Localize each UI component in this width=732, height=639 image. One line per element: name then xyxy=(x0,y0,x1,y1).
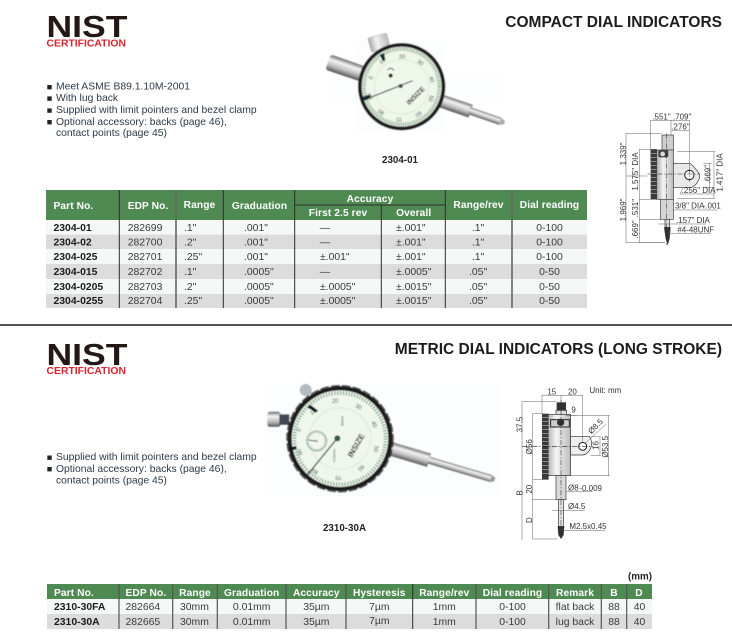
table row 2310-30A: lug back xyxy=(556,617,595,628)
technical drawing: compact indicator dimensions: 1.417" DIA xyxy=(716,153,725,192)
product photo: compact dial indicator 2304-01: 80 xyxy=(377,107,386,116)
table row 2304-025: .1" xyxy=(469,252,485,263)
table row 2304-0205: ±.0005" xyxy=(320,282,356,293)
technical drawing: metric indicator dimensions: Ø8 xyxy=(568,483,579,492)
table row 2304-015: .1" xyxy=(184,267,197,278)
table row 2304-0205: .2" xyxy=(184,282,197,293)
feature list: metric indicators xyxy=(47,452,257,486)
technical drawing: metric indicator dimensions: 20 xyxy=(525,484,534,494)
table row 2304-01: — xyxy=(320,223,331,234)
technical drawing: metric indicator dimensions: Ø4.5 xyxy=(568,502,586,511)
table row 2310-30A: 40 xyxy=(634,617,645,628)
technical drawing: compact indicator dimensions: .669" xyxy=(631,220,640,239)
table row 2304-01: 0-100 xyxy=(536,223,563,234)
technical drawing: metric indicator dimensions: 15 xyxy=(547,387,557,396)
caption: 2310-30A: 2310-30A xyxy=(323,523,366,534)
table header row: Dial reading xyxy=(520,200,579,211)
product photo: compact dial indicator 2304-01 xyxy=(325,33,507,132)
technical drawing: compact indicator dimensions xyxy=(619,112,725,245)
table header row: Graduation xyxy=(232,201,287,212)
table row 2310-30FA: 7µm xyxy=(369,602,390,613)
table row 2310-30A xyxy=(54,616,645,628)
table row 2310-30A: 282665 xyxy=(126,617,160,628)
product photo: compact dial indicator 2304-01: 30 xyxy=(416,59,424,67)
table header row: Graduation xyxy=(224,588,279,599)
technical drawing: metric indicator dimensions: 16 xyxy=(592,441,601,450)
caption: 2304-01: 2304-01 xyxy=(382,155,419,166)
table header row: EDP No. xyxy=(128,201,168,212)
table row 2304-0205: ±.0015" xyxy=(396,282,432,293)
product photo: metric dial indicator 2310-30A: 0 xyxy=(296,428,303,433)
spec table: compact dial indicators xyxy=(46,190,587,308)
unit label: mm: (mm) xyxy=(628,572,652,582)
technical drawing: metric indicator dimensions: M2.5x0.45 xyxy=(569,522,607,531)
product photo: metric dial indicator 2310-30A: INSIZE xyxy=(346,432,367,459)
product photo: metric dial indicator 2310-30A: 10 xyxy=(309,408,318,417)
logo: NIST certification (top): CERTIFICATION xyxy=(46,38,126,49)
table header row: Range/rev xyxy=(419,588,470,599)
table row 2304-025: ±.001" xyxy=(396,252,426,263)
table row 2310-30FA: 35µm xyxy=(303,602,329,613)
table row 2304-015: .0005" xyxy=(244,267,274,278)
feature list: metric indicators: contact points (page 45) xyxy=(56,475,167,486)
table row 2310-30A: 7µm xyxy=(369,616,390,627)
table row 2310-30A: 0.01mm xyxy=(233,617,270,628)
title: compact dial indicators: COMPACT DIAL INDICATORS xyxy=(505,14,722,31)
technical drawing: compact indicator dimensions: .276" xyxy=(671,122,690,131)
table header row: Accuracy xyxy=(347,194,394,205)
table row 2304-01: 282699 xyxy=(128,223,163,234)
product photo: compact dial indicator 2304-01: 10 xyxy=(378,58,387,66)
product photo: compact dial indicator 2304-01: 20 xyxy=(399,54,405,60)
product photo: compact dial indicator 2304-01: 70 xyxy=(396,115,402,121)
table row 2304-01: .1" xyxy=(469,223,485,234)
technical drawing: metric indicator dimensions: D xyxy=(525,517,534,523)
table header row: Part No. xyxy=(54,201,93,212)
table row 2304-015: 282702 xyxy=(128,267,163,278)
product photo: compact dial indicator 2304-01: 40 xyxy=(427,76,435,84)
feature list: compact indicators: Supplied with limit pointers and bezel clamp xyxy=(56,105,257,116)
technical drawing: compact indicator dimensions: .551" .709" xyxy=(652,112,691,121)
technical drawing: compact indicator dimensions: .531" xyxy=(631,199,640,217)
table header row: Part No. xyxy=(54,588,94,599)
table row 2304-015: 0-50 xyxy=(539,267,560,278)
table row 2304-025: .25" xyxy=(184,252,202,263)
technical drawing: metric indicator dimensions: Ø8.5 xyxy=(586,417,605,436)
table row 2304-02: 2304-02 xyxy=(54,238,92,249)
product photo: metric dial indicator 2310-30A: 60 xyxy=(356,463,365,472)
table row 2304-01: .1" xyxy=(184,223,197,234)
technical drawing: compact indicator dimensions: .669" xyxy=(704,165,713,183)
product photo: metric dial indicator 2310-30A xyxy=(265,383,500,497)
technical drawing: compact indicator dimensions: .157" DIA xyxy=(676,216,711,225)
product photo: compact dial indicator 2304-01: INSIZE xyxy=(406,86,427,107)
product photo: compact dial indicator 2304-01: 0 xyxy=(368,75,375,80)
table row 2310-30FA: 2310-30FA xyxy=(54,602,106,613)
product photo: metric dial indicator 2310-30A: 30 xyxy=(354,403,362,412)
product photo: metric dial indicator 2310-30A: 90 xyxy=(297,448,305,456)
product photo: metric dial indicator 2310-30A: 70 xyxy=(335,474,342,480)
feature list: metric indicators: Supplied with limit pointers and bezel clamp xyxy=(56,452,257,463)
table header row: First 2.5 rev xyxy=(309,208,367,219)
table row 2304-0255: 2304-0255 xyxy=(54,296,103,307)
table row 2304-01: ±.001" xyxy=(396,223,426,234)
product photo: metric dial indicator 2310-30A: 20 xyxy=(332,398,339,405)
product photo: metric dial indicator 2310-30A: 50 xyxy=(372,445,379,452)
product photo: compact dial indicator 2304-01: 60 xyxy=(414,109,422,118)
logo: NIST certification (bottom): CERTIFICATION xyxy=(46,366,126,377)
table row 2310-30FA: 1mm xyxy=(433,602,456,613)
feature list: metric indicators: Optional accessory: backs (page 46), xyxy=(56,464,227,475)
table row 2304-0255: .0005" xyxy=(244,296,274,307)
feature list: compact indicators xyxy=(47,81,257,139)
table row 2304-0255: .05" xyxy=(469,296,487,307)
table row 2304-01 xyxy=(54,223,563,234)
technical drawing: compact indicator dimensions: 1.339" xyxy=(619,142,628,165)
table row 2304-0205: .0005" xyxy=(244,282,274,293)
technical drawing: compact indicator dimensions: 1.575" DIA xyxy=(631,152,640,191)
table row 2304-0255: .25" xyxy=(184,296,202,307)
technical drawing: metric indicator dimensions: B xyxy=(516,490,525,496)
table row 2304-02: .2" xyxy=(184,238,197,249)
technical drawing: metric indicator dimensions: 9 xyxy=(571,405,576,414)
table row 2304-025: ±.001" xyxy=(320,252,350,263)
table row 2304-02: 0-100 xyxy=(536,238,563,249)
table header row: Overall xyxy=(396,208,431,219)
product photo: metric dial indicator 2310-30A: 40 xyxy=(370,420,378,429)
table row 2310-30FA: 30mm xyxy=(180,602,209,613)
technical drawing: metric indicator dimensions: Ø56 xyxy=(525,439,534,454)
table row 2310-30A: 1mm xyxy=(433,617,456,628)
technical drawing: metric indicator dimensions xyxy=(516,386,622,540)
table header row xyxy=(54,588,643,599)
table row 2304-0205: 282703 xyxy=(128,282,163,293)
logo: NIST certification (top): NIST xyxy=(46,9,128,44)
table row 2304-02: .001" xyxy=(244,238,268,249)
logo: NIST certification (bottom): NIST xyxy=(46,337,128,372)
product photo: compact dial indicator 2304-01: 50 xyxy=(426,94,434,102)
feature list: compact indicators: With lug back xyxy=(56,93,119,104)
table row 2304-0205 xyxy=(54,282,560,293)
table row 2304-02: 282700 xyxy=(128,238,163,249)
spec table: metric dial indicators xyxy=(47,584,652,629)
title: metric dial indicators: METRIC DIAL INDICATORS (LONG STROKE) xyxy=(395,341,722,358)
technical drawing: metric indicator dimensions: -0.009 xyxy=(579,484,603,493)
technical drawing: metric indicator dimensions: 20 xyxy=(568,387,577,396)
technical drawing: compact indicator dimensions: 1.969" xyxy=(619,198,628,221)
table row 2310-30A: 0-100 xyxy=(499,617,526,628)
table header row: Range xyxy=(184,200,216,211)
table row 2310-30A: 30mm xyxy=(180,617,209,628)
technical drawing: compact indicator dimensions: #4-48UNF xyxy=(677,225,714,234)
table row 2304-0255: 0-50 xyxy=(539,296,560,307)
technical drawing: metric indicator dimensions: 37.5 xyxy=(516,416,525,432)
product photo: metric dial indicator 2310-30A: 80 xyxy=(311,467,320,475)
table row 2304-02: .1" xyxy=(469,238,485,249)
feature list: compact indicators: Meet ASME B89.1.10M-2001 xyxy=(56,81,190,92)
table row 2310-30FA: 40 xyxy=(634,602,645,613)
table row 2310-30A: 88 xyxy=(608,617,620,628)
feature list: compact indicators: contact points (page 45) xyxy=(56,128,167,139)
table row 2304-025: 282701 xyxy=(128,252,163,263)
table header row: D xyxy=(635,588,643,599)
table row 2304-015 xyxy=(54,267,560,278)
table row 2310-30FA xyxy=(54,602,645,613)
product photo: compact dial indicator 2304-01: 90 xyxy=(367,92,375,100)
table row 2310-30FA: 0-100 xyxy=(499,602,526,613)
table header row: Range/rev xyxy=(453,200,504,211)
table row 2304-02: — xyxy=(320,238,331,249)
table row 2310-30FA: 88 xyxy=(608,602,620,613)
table row 2304-015: 2304-015 xyxy=(54,267,98,278)
table row 2304-01: .001" xyxy=(244,223,268,234)
technical drawing: metric indicator dimensions: Ø53.5 xyxy=(601,435,610,458)
table row 2304-015: — xyxy=(320,267,331,278)
table row 2304-0205: .05" xyxy=(469,282,487,293)
table header row xyxy=(54,194,579,219)
table row 2304-025: .001" xyxy=(244,252,268,263)
table header row: B xyxy=(610,588,618,599)
table row 2304-025: 0-100 xyxy=(536,252,563,263)
technical drawing: compact indicator dimensions: -.001 xyxy=(703,202,721,211)
feature list: compact indicators: Optional accessory: backs (page 46), xyxy=(56,117,227,128)
table row 2304-0205: 2304-0205 xyxy=(54,282,103,293)
table row 2310-30FA: flat back xyxy=(556,602,595,613)
table header row: Hysteresis xyxy=(353,588,406,599)
table row 2304-01: 2304-01 xyxy=(54,223,92,234)
technical drawing: compact indicator dimensions: .256" DIA xyxy=(682,186,716,195)
table row 2304-02 xyxy=(54,238,563,249)
technical drawing: compact indicator dimensions: 3/8" DIA xyxy=(675,202,705,211)
table row 2304-0255: ±.0005" xyxy=(320,296,356,307)
table row 2304-025: 2304-025 xyxy=(54,252,98,263)
table row 2310-30FA: 282664 xyxy=(126,602,160,613)
technical drawing: metric indicator dimensions: Unit: mm xyxy=(589,386,622,395)
table header row: EDP No. xyxy=(126,588,166,599)
table row 2310-30A: 2310-30A xyxy=(54,617,100,628)
table header row: Range xyxy=(179,588,211,599)
table row 2304-015: ±.0005" xyxy=(396,267,432,278)
table row 2304-02: ±.001" xyxy=(396,238,426,249)
table row 2304-015: .05" xyxy=(469,267,487,278)
table row 2304-0255: 282704 xyxy=(128,296,163,307)
table row 2310-30A: 35µm xyxy=(303,617,329,628)
product photo: metric dial indicator 2310-30A: 0.01mm xyxy=(332,449,336,462)
product photo: metric dial indicator 2310-30A: 30mm xyxy=(340,416,344,426)
table row 2304-0255: ±.0015" xyxy=(396,296,432,307)
table row 2304-025 xyxy=(54,252,563,263)
table row 2304-0255 xyxy=(54,296,560,307)
table header row: Accuracy xyxy=(293,588,340,599)
table header row: Dial reading xyxy=(483,588,542,599)
table row 2310-30FA: 0.01mm xyxy=(233,602,270,613)
table row 2304-0205: 0-50 xyxy=(539,282,560,293)
table header row: Remark xyxy=(556,588,594,599)
